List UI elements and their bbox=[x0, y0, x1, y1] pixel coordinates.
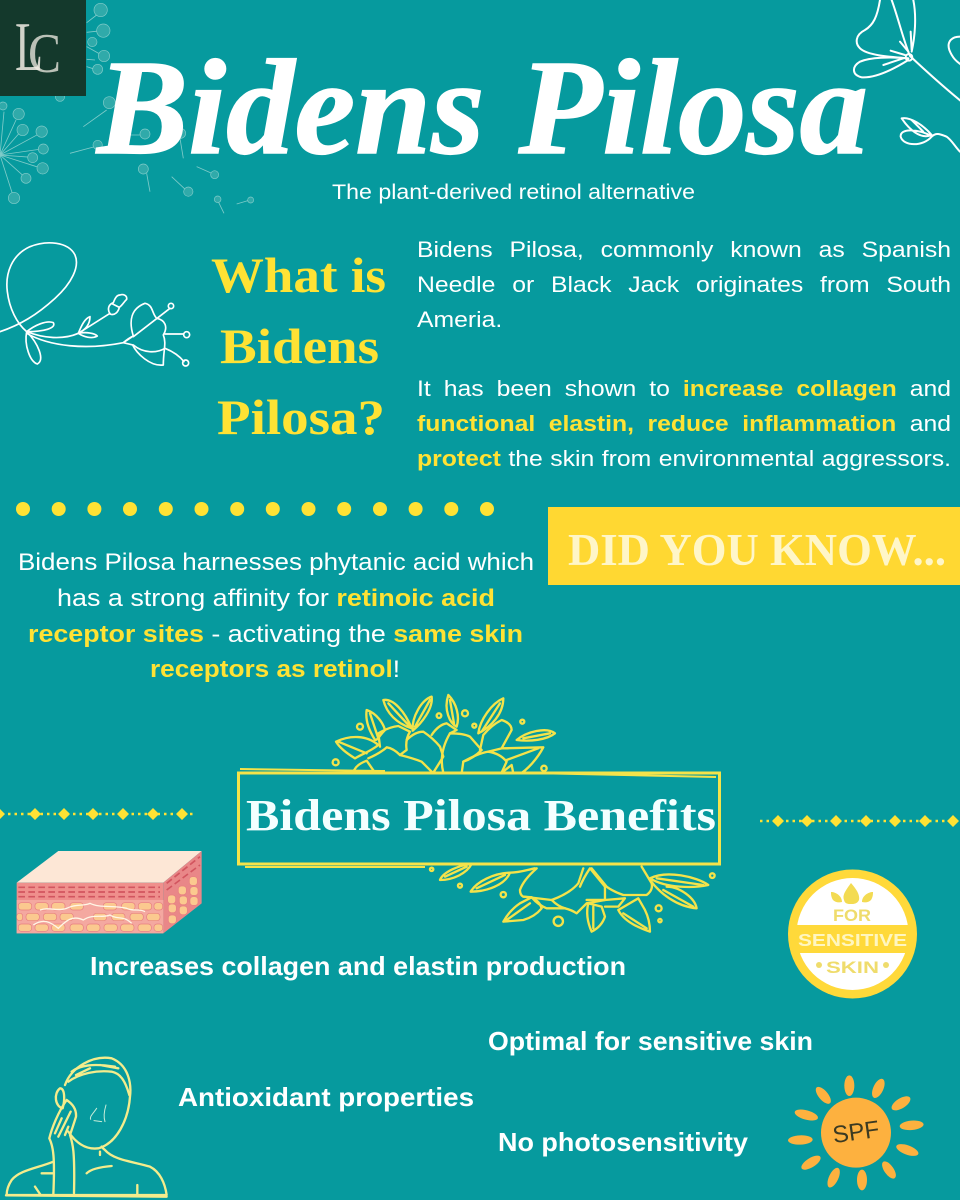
heading: what is bidens pilosa: Bidens bbox=[220, 318, 379, 374]
icon: woman touching face bbox=[6, 1058, 167, 1197]
icon: sensitive skin badge bbox=[788, 870, 917, 998]
icon: line-art flower top right bbox=[854, 0, 960, 152]
text block: what is bidens pilosa description bbox=[417, 237, 951, 471]
text block: what is bidens pilosa description: Bidens Pilosa, commonly known as Spanish bbox=[417, 237, 951, 262]
icon: line-art flower left bbox=[0, 243, 190, 366]
benefit label: antioxidant: Antioxidant properties bbox=[178, 1082, 474, 1112]
subtitle: The plant-derived retinol alternative bbox=[332, 181, 695, 204]
banner: did you know bbox=[548, 507, 960, 585]
title: Bidens Pilosa bbox=[95, 33, 868, 183]
diamond divider right bbox=[760, 815, 960, 827]
logo: LC monogram: C bbox=[28, 23, 61, 85]
icon: floral wreath bottom bbox=[430, 864, 715, 932]
icon: skin layers bbox=[17, 851, 202, 933]
banner: did you know: DID YOU KNOW... bbox=[568, 524, 946, 575]
icon: sensitive skin badge: SKIN bbox=[826, 958, 879, 977]
icon: SPF sun bbox=[788, 1075, 924, 1190]
heading: what is bidens pilosa: What is bbox=[211, 247, 386, 303]
text block: what is bidens pilosa description: It has been shown to increase collagen and bbox=[417, 376, 951, 401]
benefits title box bbox=[238, 769, 720, 867]
text block: what is bidens pilosa description: functional elastin, reduce inflammation and bbox=[417, 411, 951, 436]
text block: phytanic acid: has a strong affinity for retinoic acid bbox=[57, 585, 495, 612]
text block: phytanic acid: receptor sites - activating the same skin bbox=[28, 621, 523, 648]
icon: floral wreath top bbox=[333, 695, 555, 774]
benefit label: collagen: Increases collagen and elastin production bbox=[90, 951, 626, 981]
text block: what is bidens pilosa description: Needle or Black Jack originates from South bbox=[417, 272, 951, 297]
icon: sensitive skin badge: FOR bbox=[833, 906, 871, 925]
text block: phytanic acid bbox=[18, 549, 534, 683]
dotted divider bbox=[16, 502, 494, 516]
benefit label: photosensitivity: No photosensitivity bbox=[498, 1127, 749, 1157]
diamond divider left bbox=[0, 808, 196, 820]
text block: what is bidens pilosa description: Ameria. bbox=[417, 307, 502, 332]
benefit label: sensitive skin: Optimal for sensitive skin bbox=[488, 1026, 813, 1056]
icon: SPF sun: SPF bbox=[831, 1116, 881, 1149]
benefits title box: Bidens Pilosa Benefits bbox=[246, 791, 716, 840]
heading: what is bidens pilosa bbox=[211, 247, 386, 445]
heading: what is bidens pilosa: Pilosa? bbox=[217, 389, 385, 445]
text block: phytanic acid: receptors as retinol ! bbox=[150, 656, 400, 683]
text block: phytanic acid: Bidens Pilosa harnesses phytanic acid which bbox=[18, 549, 534, 576]
text block: what is bidens pilosa description: protect the skin from environmental aggressors. bbox=[417, 446, 951, 471]
icon: dandelion illustration bbox=[0, 3, 254, 213]
logo: LC monogram bbox=[0, 0, 86, 96]
icon: sensitive skin badge: SENSITIVE bbox=[798, 930, 907, 950]
logo: LC monogram: L bbox=[15, 9, 43, 86]
